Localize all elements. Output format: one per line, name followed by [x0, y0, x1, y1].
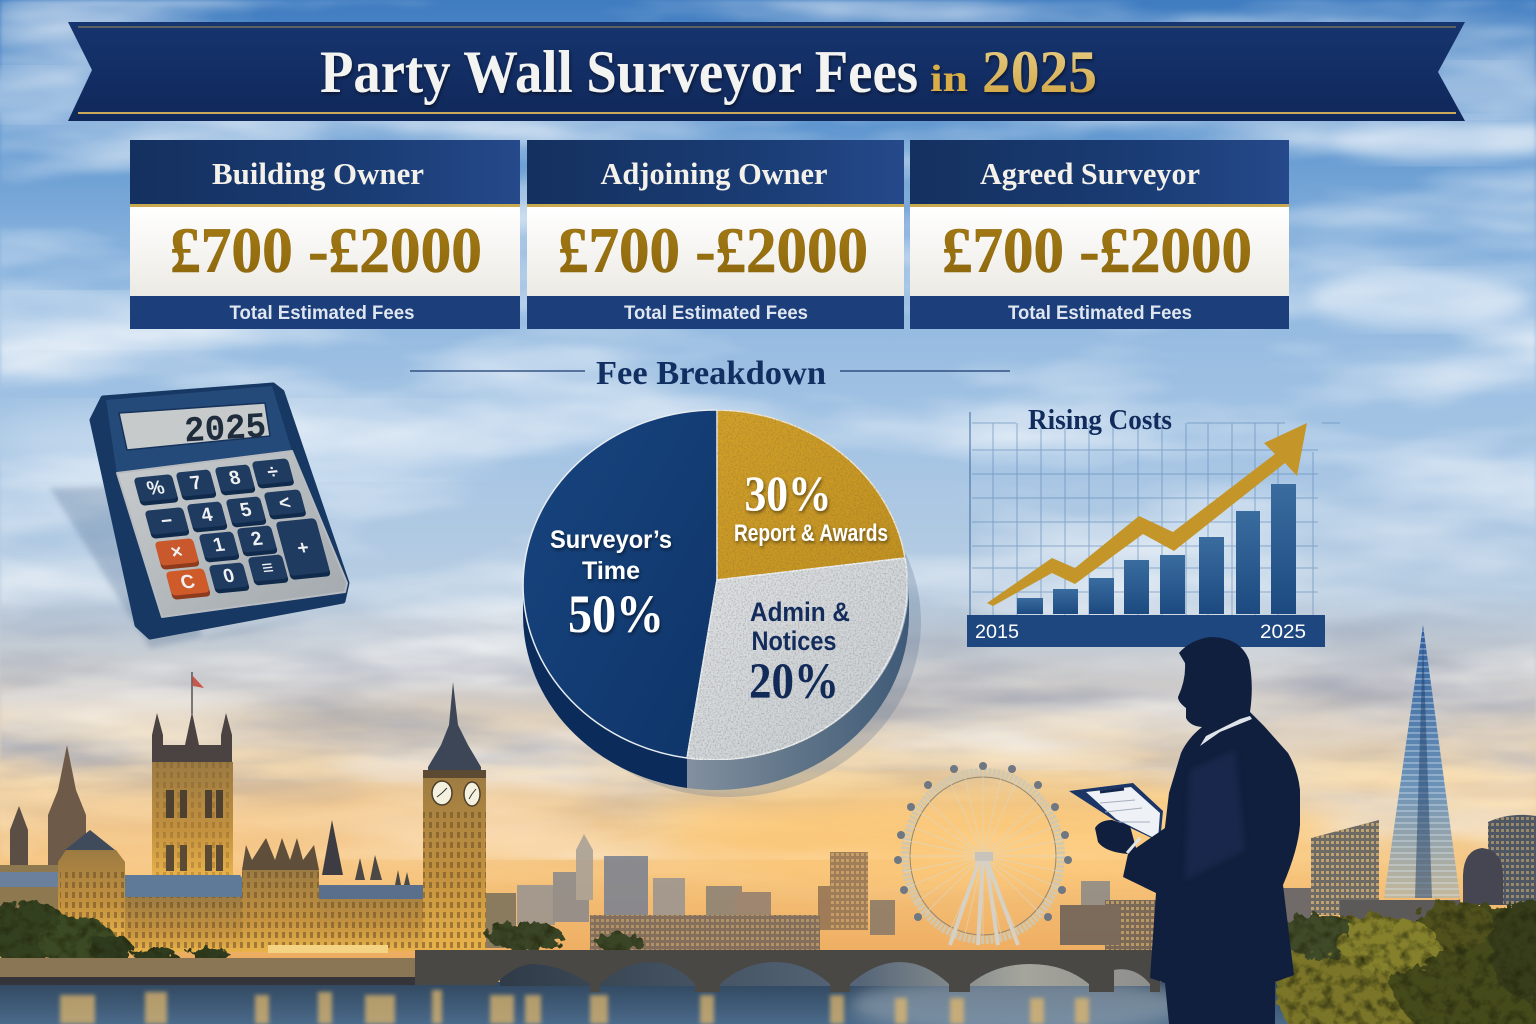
calculator keypad: 1	[211, 534, 227, 556]
slice: admin and notices	[687, 558, 907, 760]
clipboard	[1069, 783, 1163, 842]
fee card: adjoining owner: Total Estimated Fees	[624, 303, 808, 324]
slice: admin and notices: Admin &	[750, 597, 850, 627]
trees right	[1275, 900, 1536, 1024]
fee card: adjoining owner	[527, 140, 904, 329]
westminster bridge	[415, 950, 1160, 992]
shard and right-hand towers	[1311, 625, 1536, 925]
london eye	[894, 762, 1072, 945]
fee card: agreed surveyor: £700 -£2000	[942, 215, 1252, 287]
bars	[1017, 484, 1296, 614]
fee breakdown heading: Fee Breakdown	[596, 355, 826, 392]
river thames with reflections	[0, 975, 1536, 1024]
pie chart	[523, 410, 921, 797]
slice: surveyor's time: 50%	[568, 584, 664, 644]
victoria tower	[152, 672, 233, 878]
calculator keypad: ÷	[265, 461, 281, 483]
calculator keypad: −	[158, 510, 175, 532]
title text: in	[930, 58, 968, 100]
slice: report and awards: 30%	[744, 465, 832, 521]
slice: admin and notices: Notices	[752, 626, 836, 656]
pie side walls	[523, 585, 909, 790]
calculator keypad: 7	[188, 472, 204, 494]
slice: surveyor's time: Time	[582, 557, 640, 585]
big ben	[423, 682, 486, 950]
trees left	[0, 900, 644, 967]
houses of parliament	[0, 672, 516, 953]
calculator keypad	[133, 458, 331, 600]
fee card: agreed surveyor: Total Estimated Fees	[1008, 303, 1192, 324]
line and bar chart: rising costs: Rising Costs	[1028, 405, 1172, 436]
hand and sleeve	[1095, 820, 1165, 877]
rising arrow	[987, 423, 1307, 606]
fee card: adjoining owner: Adjoining Owner	[600, 156, 828, 191]
distant city skyline	[517, 834, 1319, 950]
banner title	[68, 22, 1465, 121]
fee card: adjoining owner: £700 -£2000	[558, 215, 868, 287]
calculator keypad: 2	[249, 528, 265, 550]
year axis band: 2025	[1260, 622, 1306, 643]
slice: surveyor's time: Surveyor’s	[550, 526, 672, 554]
line and bar chart: rising costs	[967, 405, 1340, 647]
year axis band: 2015	[975, 622, 1019, 643]
slice: admin and notices: 20%	[749, 654, 839, 710]
icon: calculator	[50, 385, 347, 648]
icon: calculator: 2025	[183, 407, 267, 452]
title text: Party Wall Surveyor Fees	[320, 39, 918, 105]
calculator keypad: <	[276, 492, 293, 514]
calculator keypad: 0	[221, 565, 237, 587]
main wings	[125, 896, 260, 952]
calculator keypad: ≡	[259, 557, 276, 579]
fee card: agreed surveyor: Agreed Surveyor	[980, 156, 1200, 191]
title text: 2025	[982, 39, 1097, 105]
embankment wall	[0, 958, 420, 985]
slice: report and awards	[717, 410, 905, 580]
calculator keypad: ×	[168, 541, 185, 563]
calculator keypad: %	[144, 476, 167, 500]
calculator keypad: +	[295, 537, 311, 559]
calculator keypad: 4	[199, 504, 215, 526]
calculator keypad: 8	[227, 467, 243, 489]
calculator keypad: 5	[238, 499, 254, 521]
slice: report and awards: Report & Awards	[734, 520, 888, 547]
fee card: building owner	[130, 140, 520, 329]
surveyor silhouette with clipboard	[1069, 637, 1300, 1024]
fee card: building owner: Building Owner	[212, 156, 424, 191]
fee card: agreed surveyor	[910, 140, 1289, 329]
fee card: building owner: £700 -£2000	[170, 215, 482, 287]
calculator keypad: C	[178, 571, 198, 594]
fee card: building owner: Total Estimated Fees	[230, 303, 414, 324]
slice: surveyor's time	[523, 410, 717, 758]
year axis band	[967, 615, 1325, 647]
